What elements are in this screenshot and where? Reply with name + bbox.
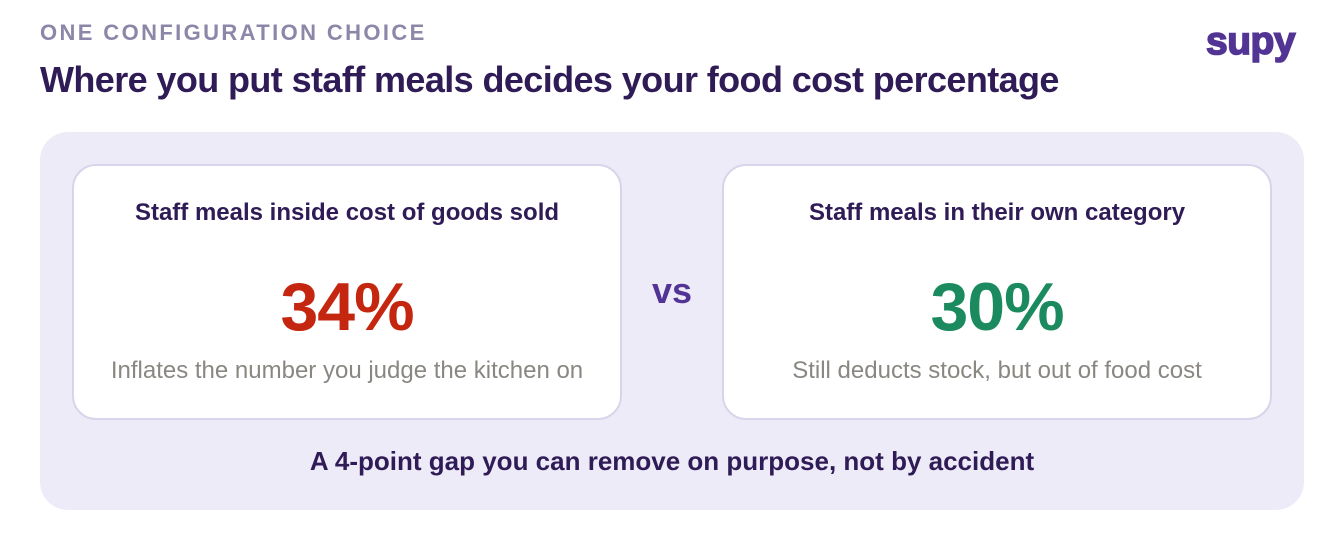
title: Where you put staff meals decides your food cost percentage	[40, 59, 1059, 100]
card heading: Staff meals in their own category	[809, 199, 1185, 226]
value: 30%: 30%	[930, 269, 1064, 345]
vs label: vs	[652, 270, 692, 311]
card heading: Staff meals inside cost of goods sold	[135, 199, 559, 226]
card: inside cost of goods sold	[72, 164, 622, 420]
card caption: Inflates the number you judge the kitchen on	[111, 357, 583, 384]
takeaway: A 4-point gap you can remove on purpose, not by accident	[310, 446, 1034, 476]
card: own category	[722, 164, 1272, 420]
card caption: Still deducts stock, but out of food cost	[792, 357, 1202, 384]
value: 34%: 34%	[280, 269, 414, 345]
panel: comparison	[40, 132, 1304, 510]
eyebrow label: ONE CONFIGURATION CHOICE	[40, 20, 427, 45]
logo: supy: supy	[1206, 20, 1295, 63]
